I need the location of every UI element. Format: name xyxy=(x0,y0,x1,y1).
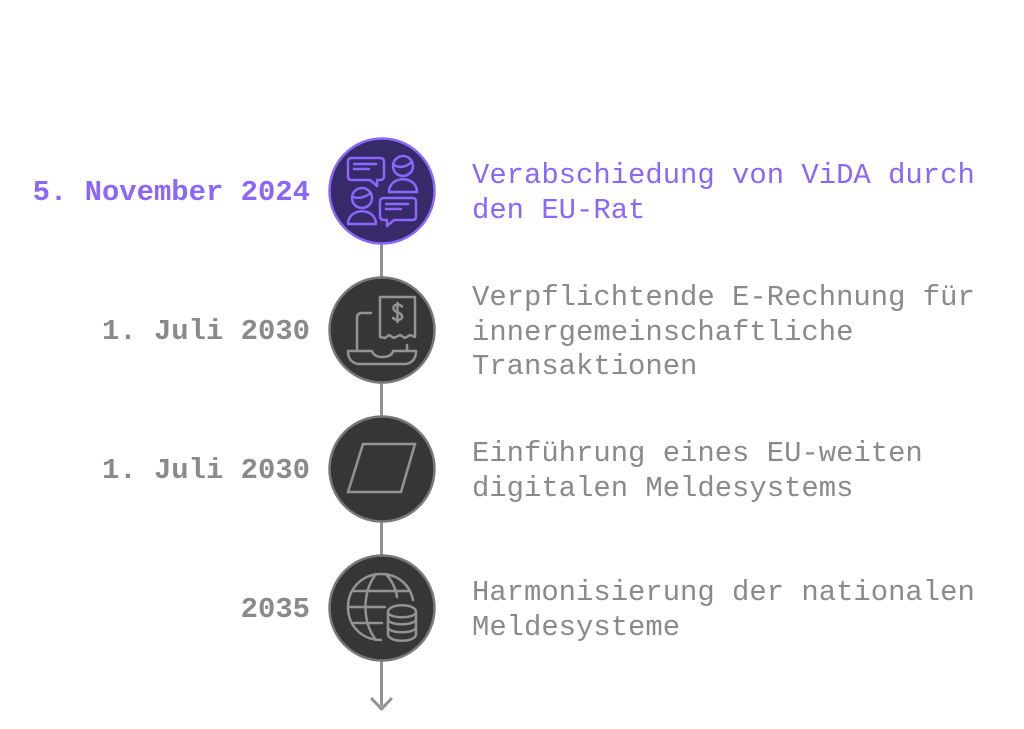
timeline arrow xyxy=(372,240,391,709)
text: Verpflichtende E-Rechnung: Verpflichtende E-Rechnung für xyxy=(472,281,975,314)
text: Harmonisierung: Harmonisierung der nationalen xyxy=(472,576,975,609)
icon: laptop with invoice xyxy=(330,278,434,382)
text: Harmonisierung xyxy=(472,576,975,644)
text: Verabschiedung von ViDA: den EU-Rat xyxy=(472,194,645,227)
text: Verpflichtende E-Rechnung: innergemeinschaftliche xyxy=(472,316,853,349)
text: Verpflichtende E-Rechnung xyxy=(472,281,975,383)
date: 2035: 2035 xyxy=(241,593,310,626)
date: 1. Juli 2030: 1. Juli 2030 xyxy=(102,315,310,348)
text: Einführung Meldesystem: digitalen Meldesystems xyxy=(472,472,853,505)
text: Einführung Meldesystem: Einführung eines EU-weiten xyxy=(472,437,923,470)
text: Verpflichtende E-Rechnung: Transaktionen xyxy=(472,350,697,383)
text: Verabschiedung von ViDA xyxy=(472,159,975,227)
icon: parallelogram xyxy=(330,416,434,522)
date: 1. Juli 2030 second: 1. Juli 2030 xyxy=(102,454,310,487)
text: Verabschiedung von ViDA: Verabschiedung von ViDA durch xyxy=(472,159,975,192)
text: Einführung Meldesystem xyxy=(472,437,923,505)
icon: people in conversation xyxy=(330,138,434,244)
icon: globe with database xyxy=(330,556,434,660)
text: Harmonisierung: Meldesysteme xyxy=(472,611,680,644)
date: 5. November 2024: 5. November 2024 xyxy=(33,176,310,209)
